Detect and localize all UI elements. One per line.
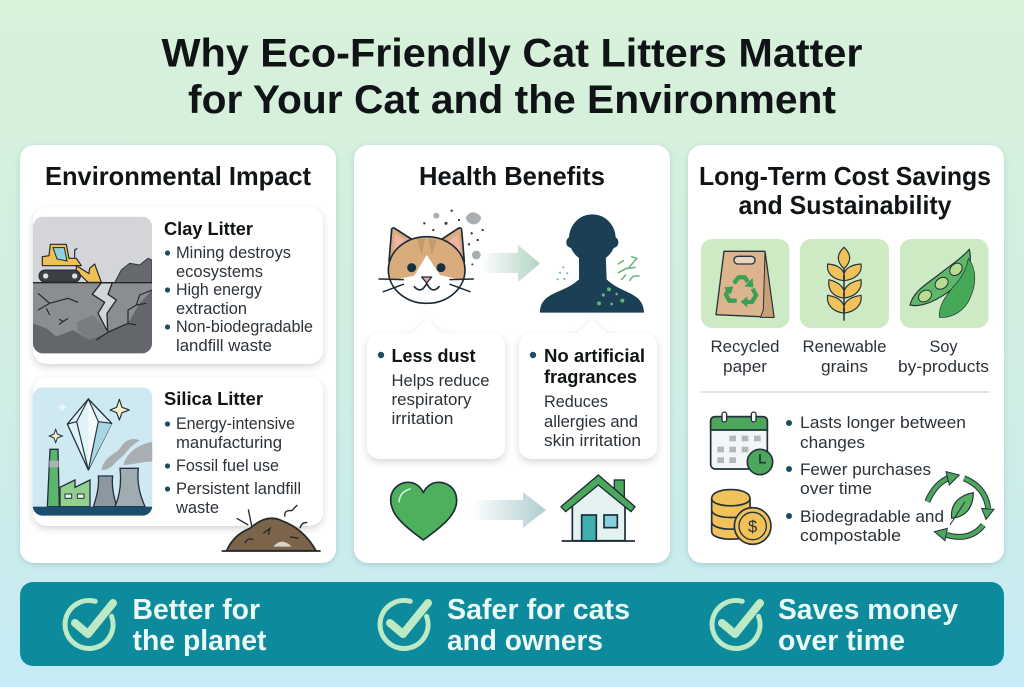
title: Why Eco-Friendly Cat Litters Matter	[162, 32, 862, 76]
text: clay litter: Mining destroys	[176, 243, 291, 262]
panel: environmental impact	[20, 145, 336, 563]
tile: recycled paper: Recycled	[710, 337, 780, 356]
icon: calendar with clock	[711, 412, 773, 475]
text: clay litter: ecosystems	[176, 262, 263, 281]
heading: cost savings: and Sustainability	[738, 190, 952, 220]
icon: home	[561, 475, 635, 541]
text: clay litter: Non-biodegradable	[176, 317, 313, 336]
takeaway: safer for cats and owners: Safer for cats	[447, 594, 630, 626]
arrow: heart to home	[471, 492, 546, 528]
callout: less dust	[367, 320, 505, 459]
arrow: cat to person	[480, 245, 540, 282]
bullet list: savings: Lasts longer between	[800, 413, 966, 432]
takeaway: better for the planet	[65, 594, 267, 657]
banner: key takeaways	[20, 582, 1004, 666]
tile: recycled paper	[701, 239, 790, 376]
title	[162, 32, 862, 122]
heading: cost savings: Long-Term Cost Savings	[699, 161, 991, 191]
heading: cost savings	[699, 161, 991, 220]
text: silica litter: Fossil fuel use	[176, 456, 279, 475]
icon: recycling leaf	[927, 472, 994, 541]
takeaway: safer for cats and owners: and owners	[447, 625, 603, 657]
callout: no artificial fragrances: allergies and	[544, 412, 638, 431]
text: clay litter: Clay Litter	[164, 218, 253, 239]
tile: renewable grains: Renewable	[802, 337, 886, 356]
takeaway: safer for cats and owners	[380, 594, 630, 657]
icon: coins	[712, 490, 771, 544]
takeaway: saves money over time	[712, 594, 958, 657]
bullet list: savings: over time	[800, 479, 872, 498]
text: clay litter: High energy	[176, 280, 263, 299]
callout: less dust: Helps reduce	[392, 371, 490, 390]
tile: renewable grains	[800, 239, 889, 376]
text: silica litter: Energy-intensive	[176, 414, 295, 433]
callout: no artificial fragrances: skin irritation	[544, 431, 641, 450]
takeaway: saves money over time: Saves money	[778, 594, 958, 626]
callout: less dust: irritation	[392, 409, 454, 428]
takeaway: better for the planet: the planet	[132, 625, 267, 657]
title: for Your Cat and the Environment	[188, 78, 836, 122]
callout: no artificial fragrances: fragrances	[544, 366, 637, 387]
icon: heart	[391, 482, 457, 540]
tile: renewable grains: grains	[821, 357, 868, 376]
illustration: silica crystal and factory	[33, 387, 152, 517]
takeaway: better for the planet: Better for	[132, 594, 260, 626]
tile: soy by-products: by-products	[898, 357, 989, 376]
tile: soy by-products: Soy	[930, 337, 958, 356]
tile: soy by-products	[898, 239, 989, 376]
callout: less dust: respiratory	[392, 390, 472, 409]
heading: health benefits: Health Benefits	[419, 161, 605, 191]
text: clay litter: extraction	[176, 299, 247, 318]
callout: no artificial fragrances: Reduces	[544, 392, 608, 411]
callout: less dust: Less dust	[392, 345, 476, 366]
text: silica litter: Silica Litter	[164, 388, 263, 409]
callout: no artificial fragrances: No artificial	[544, 345, 645, 366]
icon: landfill waste pile	[222, 505, 321, 551]
text: silica litter: waste	[175, 498, 219, 517]
text: clay litter	[164, 218, 313, 355]
bullet list: savings: changes	[800, 433, 865, 452]
bullet list: savings: Fewer purchases	[800, 460, 931, 479]
bullet list: savings	[786, 413, 966, 545]
callout: no artificial fragrances	[519, 320, 657, 459]
heading: environmental impact: Environmental Impact	[45, 161, 311, 191]
panel: health benefits	[354, 145, 670, 563]
tile: recycled paper: paper	[723, 357, 767, 376]
card: silica litter	[33, 377, 323, 526]
text: clay litter: landfill waste	[176, 336, 272, 355]
icon: person with irritation	[540, 214, 644, 313]
illustration: clay mining	[33, 217, 152, 353]
panel: cost savings and sustainability	[688, 145, 1004, 563]
icon: cat with dust	[379, 209, 484, 303]
text: silica litter	[164, 388, 301, 517]
bullet list: savings: compostable	[800, 526, 901, 545]
takeaway: saves money over time: over time	[778, 625, 905, 657]
text: silica litter: Persistent landfill	[176, 479, 301, 498]
card: clay litter	[33, 207, 323, 364]
bullet list: savings: Biodegradable and	[800, 507, 944, 526]
text: silica litter: manufacturing	[176, 433, 282, 452]
icon: coins: $	[748, 517, 757, 536]
